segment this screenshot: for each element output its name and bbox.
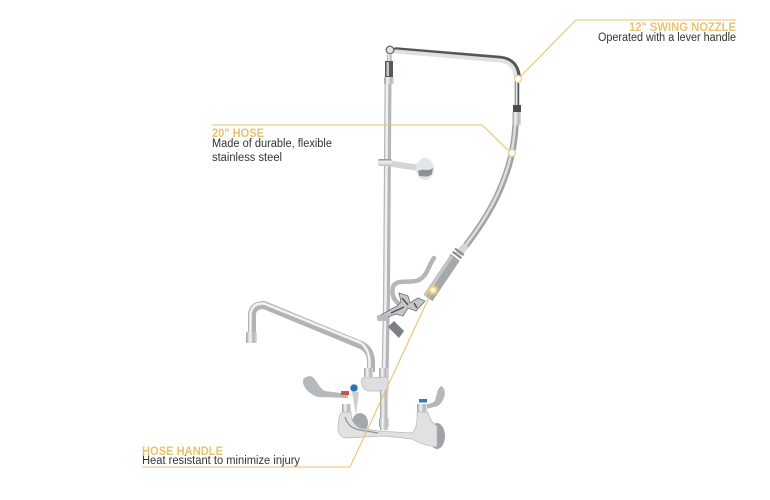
heading: 12" SWING NOZZLE (629, 20, 736, 34)
left wrist-blade handle (303, 376, 349, 398)
faucet assembly (246, 46, 521, 449)
callout: 20" hose (212, 125, 516, 164)
flexible hose (464, 105, 521, 248)
description: Operated with a lever handle (598, 32, 736, 44)
leader line (142, 291, 432, 467)
heading: 20" HOSE (212, 126, 264, 140)
vertical riser pole (383, 84, 388, 430)
spout outlet (246, 332, 257, 343)
spout (250, 303, 371, 372)
description: Heat resistant to minimize injury (142, 455, 300, 467)
mixing body (352, 368, 389, 430)
marker dot (514, 76, 522, 82)
marker dot (508, 150, 516, 156)
heading: HOSE HANDLE (142, 444, 223, 458)
leader line (212, 125, 509, 151)
callout: hose handle (142, 284, 439, 467)
swing nozzle arm (396, 50, 518, 105)
top swivel joint and collar (384, 46, 394, 84)
wall-mount base (338, 404, 445, 449)
marker dot (427, 284, 439, 296)
blue hot and cold button (350, 384, 358, 392)
callout: 12" swing nozzle (514, 20, 736, 82)
spray valve body and paddle (377, 293, 425, 338)
spray valve hook lever (392, 258, 434, 304)
hose handle (425, 245, 466, 298)
wall bracket (378, 158, 434, 180)
callout: 20" hose: stainless steel (212, 152, 282, 164)
description: Made of durable, flexible (212, 138, 332, 150)
leader line (520, 20, 736, 77)
right wrist-blade handle (419, 386, 445, 410)
